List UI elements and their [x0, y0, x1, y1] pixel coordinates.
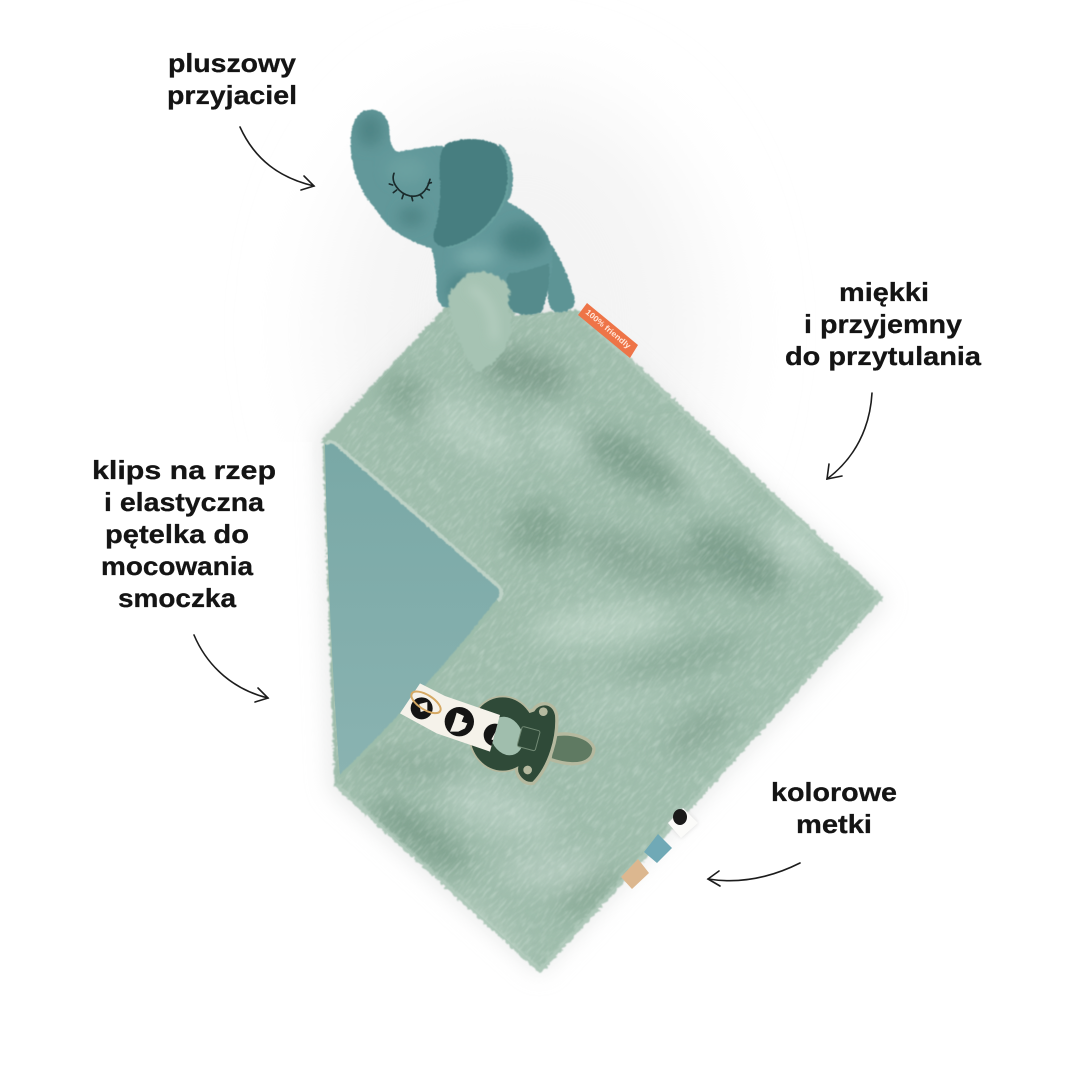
label: klips na rzep: i elastyczna [104, 487, 265, 517]
label: miękki i przyjemny do przytulania: do przytulania [785, 341, 982, 371]
label: pluszowy przyjaciel [167, 48, 297, 110]
blanket light edge [337, 312, 880, 970]
blue tag [644, 834, 672, 863]
shield studs [539, 707, 548, 716]
teether ring [470, 697, 535, 771]
body shading [357, 113, 547, 307]
orange brand tag: 100% friendly [584, 308, 633, 351]
label: kolorowe metki: kolorowe [771, 777, 897, 807]
back ear [498, 143, 513, 202]
front ear [433, 139, 509, 247]
label: klips na rzep: klips na rzep [92, 455, 276, 485]
soft shadow of blanket [318, 285, 888, 975]
head and body [351, 109, 553, 307]
fold lower edge [340, 601, 498, 777]
blanket knot in elephant hand [447, 272, 510, 372]
teether shield [516, 704, 557, 784]
label: klips na rzep: mocowania [101, 551, 254, 581]
label: klips na rzep [92, 455, 276, 613]
folded corner teal underside [325, 442, 501, 777]
label: miękki i przyjemny do przytulania: miękki [839, 277, 929, 307]
hind leg [548, 245, 575, 312]
ear light rim [447, 147, 509, 247]
white tag with dot [668, 808, 698, 838]
label: kolorowe metki [771, 777, 897, 839]
elephant plush [351, 109, 638, 372]
ring outline [470, 697, 535, 771]
label: klips na rzep: pętelka do [105, 519, 249, 549]
label: klips na rzep: smoczka [118, 583, 237, 613]
label: kolorowe metki: metki [796, 809, 872, 839]
label: pluszowy przyjaciel: pluszowy [168, 48, 297, 78]
arrow to blanket [827, 393, 872, 479]
blanket fur body [325, 275, 880, 970]
background haze [330, 90, 710, 570]
arrow to elephant [240, 127, 314, 190]
colourful tags [621, 808, 698, 889]
arrow to clip [194, 635, 268, 702]
infographic page [94, 52, 982, 974]
plush comforter blanket [320, 173, 884, 974]
arrow to tags [708, 863, 800, 886]
pacifier clip strap and teether [400, 683, 594, 784]
fold top highlight [326, 442, 501, 601]
ring clasp [517, 726, 540, 751]
knot fur highlight [470, 288, 494, 340]
ring hole [484, 711, 529, 761]
white tag shadow [668, 808, 698, 838]
orange brand tag [578, 303, 638, 358]
label: miękki i przyjemny do przytulania [785, 277, 982, 371]
mottled fur shading [334, 313, 874, 961]
teether handle [550, 734, 594, 764]
label: miękki i przyjemny do przytulania: i przyjemny [804, 309, 963, 339]
label: pluszowy przyjaciel: przyjaciel [167, 80, 297, 110]
white label panels [60, 44, 312, 630]
printed strap [400, 683, 500, 752]
front leg [506, 263, 549, 315]
tan tag [621, 859, 649, 889]
elastic loop [408, 687, 444, 717]
sleeping eye [389, 173, 431, 201]
